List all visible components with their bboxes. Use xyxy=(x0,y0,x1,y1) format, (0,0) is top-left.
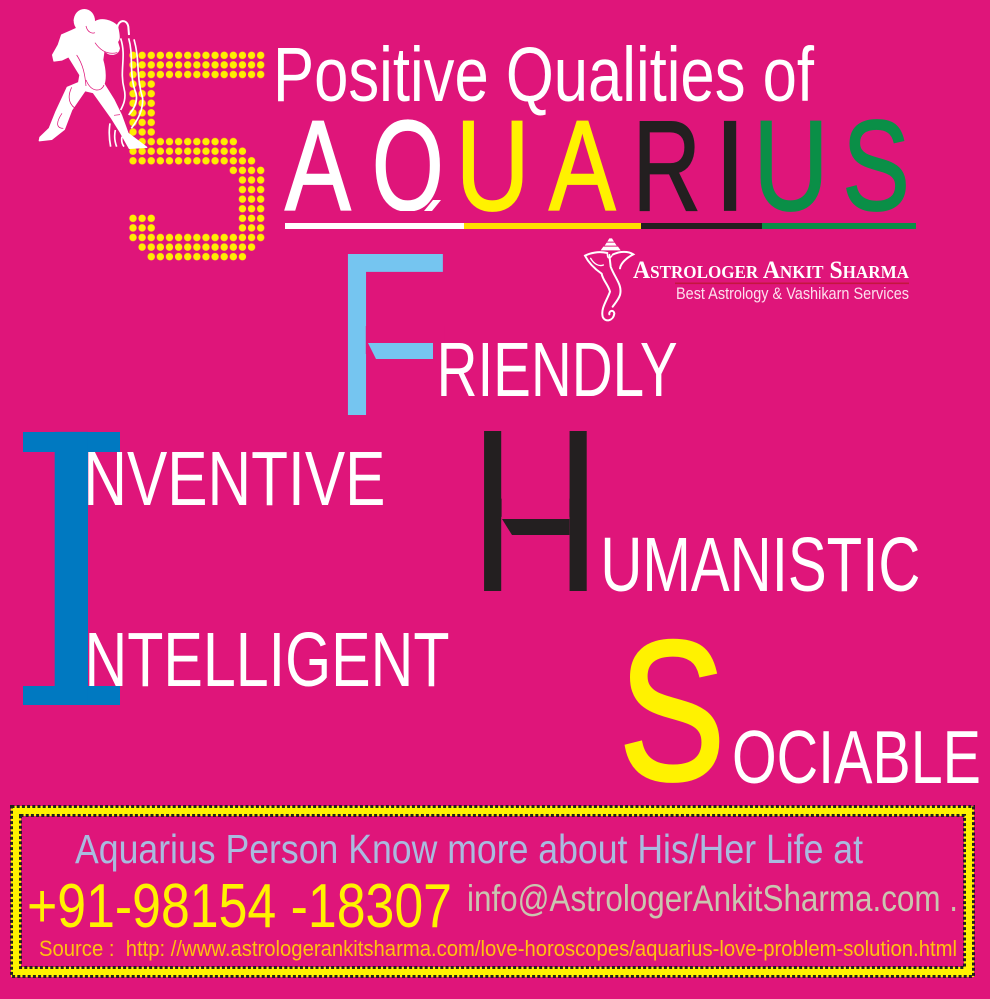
heading: AQUARIUS in four colours: A xyxy=(285,96,351,238)
big letter F: F xyxy=(332,203,451,465)
heading: AQUARIUS in four colours xyxy=(284,119,906,212)
big letter S: S xyxy=(619,600,725,821)
heading: AQUARIUS in four colours: A xyxy=(549,95,616,238)
logo tagline: Best Astrology & Vashikarn Services xyxy=(676,285,909,303)
logo: Astrologer Ankit Sharma xyxy=(585,238,909,320)
heading underline xyxy=(285,223,916,229)
word NVENTIVE: NVENTIVE xyxy=(83,436,385,522)
word RIENDLY: RIENDLY xyxy=(437,327,678,413)
logo name: Astrologer Ankit Sharma xyxy=(633,257,909,284)
panel: contact box xyxy=(12,806,974,976)
qualities: Inventive and Intelligent xyxy=(22,347,449,790)
contact headline: Aquarius Person Know more about His/Her Life at xyxy=(75,826,864,872)
quality: Friendly xyxy=(332,203,678,465)
quality: Sociable xyxy=(619,600,981,821)
word NTELLIGENT: NTELLIGENT xyxy=(84,617,450,703)
heading: AQUARIUS in four colours: R xyxy=(632,94,701,237)
heading: AQUARIUS in four colours: S xyxy=(842,96,910,238)
big letter I: I xyxy=(22,347,121,790)
heading: AQUARIUS in four colours: Q xyxy=(372,94,444,238)
logo rule xyxy=(675,282,909,284)
title: Positive Qualities of: Positive Qualities of xyxy=(273,32,814,118)
quality: Humanistic xyxy=(469,381,920,641)
icon: Aquarius water bearer xyxy=(39,9,147,148)
yellow dashed border xyxy=(12,806,974,976)
heading: AQUARIUS in four colours: U xyxy=(456,94,530,238)
phone number: +91-98154 -18307 xyxy=(27,872,452,941)
icon: Ganesha xyxy=(585,238,633,320)
heading: AQUARIUS in four colours: I xyxy=(714,94,746,237)
dot-matrix letter S xyxy=(128,50,265,261)
heading: AQUARIUS in four colours: U xyxy=(753,94,829,237)
big letter H: H xyxy=(469,381,602,641)
